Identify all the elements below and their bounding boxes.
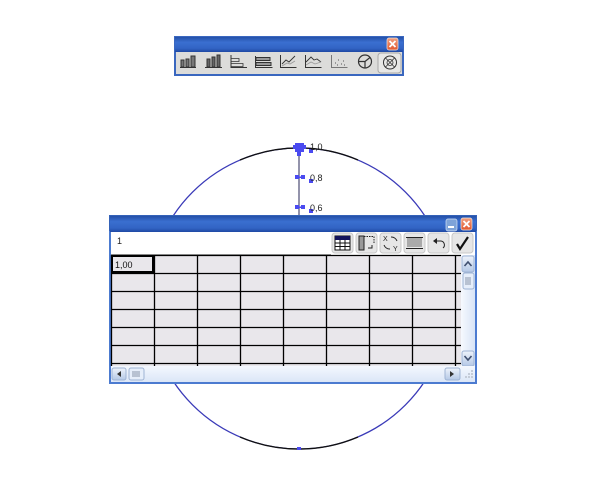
icon: area graph [306,55,322,68]
icon: bar graph [231,55,247,68]
window title bar [110,216,476,232]
icon: stacked column graph [205,55,222,68]
selection handles [293,143,313,450]
icon: stacked bar graph [256,56,272,68]
icon: column graph [180,56,196,68]
icon: import data [332,233,353,253]
axis labels: 0,6 [310,203,323,213]
resize grip [465,370,473,378]
close button [461,218,472,230]
axis labels: 0,8 [310,173,323,183]
chart type icons [180,53,401,73]
icon: switch x y: Y [393,246,398,253]
radar chart circle [148,142,450,450]
icon: radar graph selected [378,53,401,73]
toolbar title bar [175,37,403,52]
icon: apply check [452,233,473,253]
vertical scrollbar [461,255,475,366]
axis labels: 1,0 [310,142,323,152]
data grid [111,255,461,366]
horizontal scrollbar [111,366,475,382]
value entry field: 1 [117,236,122,246]
chart axis [298,148,300,216]
value entry field [111,232,475,255]
selected cell [112,256,153,272]
icon: switch x y [380,233,401,253]
toolbar close button [387,38,398,50]
icon: revert [428,233,449,253]
icon: switch x y: X [383,236,388,243]
graph data window [109,216,477,384]
icon: cell style [404,233,425,253]
data window buttons [332,233,473,253]
icon: line graph [280,55,296,68]
icon: scatter graph [332,55,348,68]
icon: transpose [356,233,377,253]
selected cell: 1,00 [115,260,133,270]
minimize button [446,219,457,231]
axis labels [310,142,323,213]
icon: pie graph [358,55,372,68]
graph tool toolbar [175,37,403,75]
